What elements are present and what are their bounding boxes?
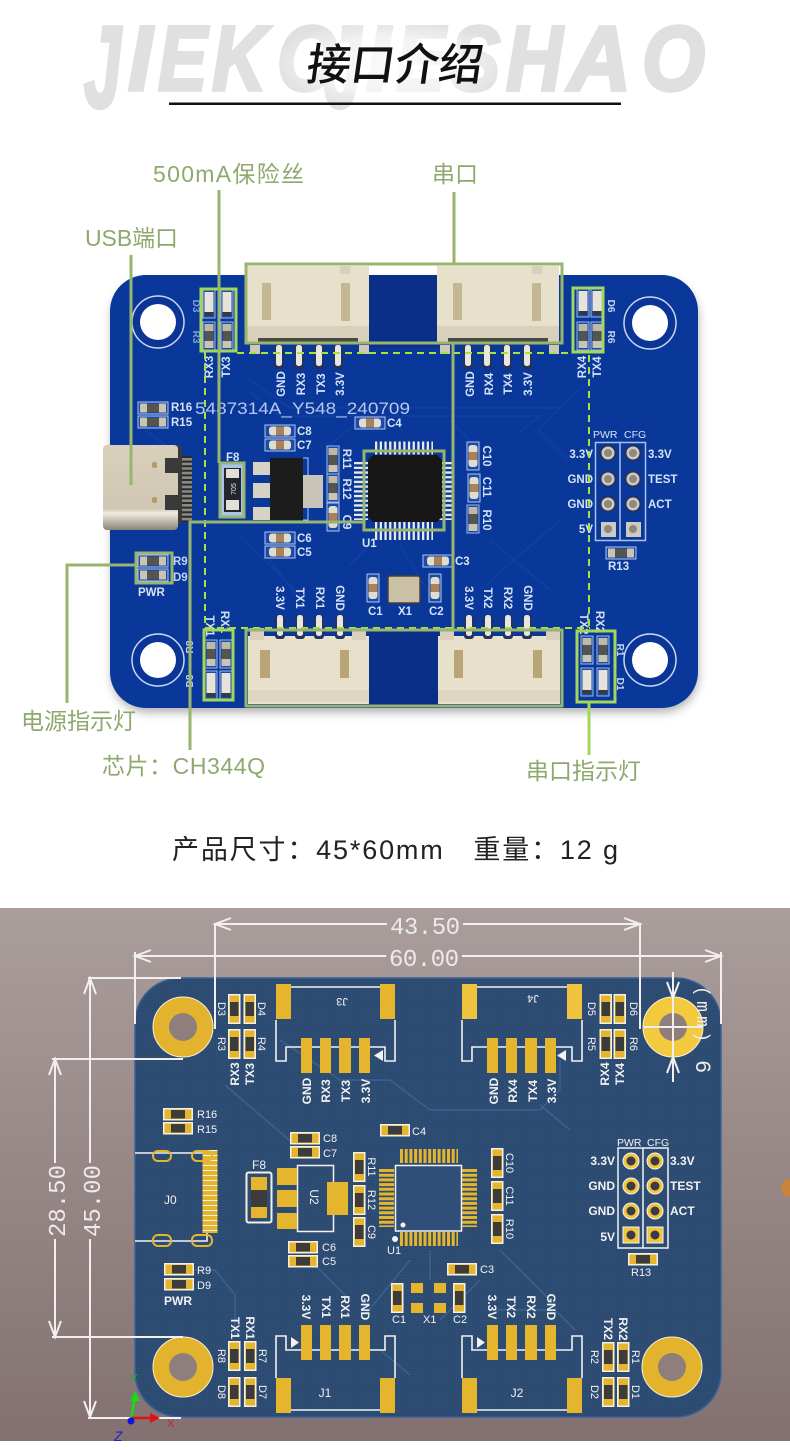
SMD group D5 D6 R5 R6 — [585, 994, 639, 1086]
SMD R9 D9 PWR — [164, 1263, 211, 1308]
connector J2 — [462, 1294, 582, 1413]
resistors R16 R15: R16 — [171, 402, 192, 414]
resistor R13 — [606, 547, 636, 573]
SMD group R8 R7 D8 D7: RX1 — [243, 1316, 257, 1340]
watermark heading: O — [642, 8, 705, 110]
mounting pads — [153, 997, 703, 1397]
SMD C10 C11 R10: C11 — [503, 1186, 515, 1206]
board body — [110, 275, 698, 708]
watermark heading: J — [324, 3, 362, 132]
pin labels: bottom: RX1 — [313, 587, 325, 610]
fuse callout — [219, 190, 244, 517]
dimension: 28.50: 28.50 — [46, 1165, 73, 1237]
fuse F8: F8 — [252, 1158, 266, 1172]
connector J2: RX2 — [524, 1295, 538, 1319]
label: serial port: 串口 — [432, 161, 478, 187]
PCB body — [135, 978, 721, 1417]
chip callout — [190, 451, 444, 750]
connector J0: J0 — [164, 1193, 177, 1207]
LED group: bottom right: TX2 — [577, 613, 589, 635]
crystal X1 with C1 C2: X1 — [423, 1314, 436, 1326]
connector J1: GND — [358, 1294, 372, 1321]
axes gizmo: Z — [113, 1428, 123, 1444]
header PWR CFG: 3.3V — [670, 1154, 695, 1168]
header PWR CFG: GND — [588, 1179, 615, 1193]
header block PWR CFG: PWR — [593, 429, 618, 441]
watermark heading: E — [158, 7, 209, 110]
components C10 C11 R10: C11 — [480, 477, 492, 498]
power LED callout — [67, 553, 172, 703]
panel: callout lines — [67, 190, 615, 755]
SMD C10 C11 R10: C10 — [503, 1153, 515, 1173]
watermark heading: I — [128, 8, 154, 111]
pin labels: top: RX3 — [296, 373, 308, 395]
SMD group R2 R1 D2 D1: D2 — [588, 1385, 600, 1399]
LED group: top left: R3 — [190, 331, 201, 344]
label: power LED: 电源指示灯 — [21, 708, 136, 734]
dashed routing — [205, 352, 590, 630]
LED boxes — [201, 288, 615, 755]
LED group: top left: TX3 — [221, 356, 233, 378]
SMD group R8 R7 D8 D7: D7 — [256, 1385, 268, 1399]
chip U1: U1 — [387, 1245, 401, 1257]
connector J4: J4 — [527, 992, 539, 1004]
connector J3 — [276, 984, 395, 1104]
spec line: 产品尺寸：45*60mm 重量：12 g — [172, 835, 618, 865]
LED group: bottom right: D1 — [614, 678, 625, 691]
pin labels: bottom: GND — [521, 585, 533, 611]
SMD group D5 D6 R5 R6: R5 — [585, 1037, 597, 1051]
regulator U2: U2 — [307, 1189, 321, 1205]
orange marker — [781, 1179, 790, 1197]
SMD group R2 R1 D2 D1: TX2 — [601, 1318, 615, 1340]
components R11 R12 C9: R11 — [340, 449, 352, 470]
dimension: hole diameter: (mm) — [691, 986, 711, 1042]
LED group: top right: RX4 — [577, 355, 589, 378]
LED group: bottom right: RX2 — [593, 611, 605, 633]
connector J3: J3 — [336, 995, 348, 1007]
LED group: bottom left: RX1 — [218, 611, 230, 634]
pin labels: top: 3.3V — [335, 372, 347, 396]
connector J2: J2 — [511, 1386, 524, 1400]
connector J4: GND — [487, 1077, 501, 1104]
LED group: bottom left: TX1 — [203, 615, 215, 637]
connector J1: 3.3V — [299, 1295, 313, 1319]
SMD C8 C7 C6 C5 C4 C3: C5 — [322, 1256, 336, 1268]
header: title block — [84, 3, 705, 132]
connector J3: 3.3V — [359, 1079, 373, 1103]
board shadow — [112, 282, 698, 712]
pin labels: top: TX4 — [503, 373, 515, 395]
SMD C8 C7 C6 C5 C4 C3 — [288, 1124, 494, 1276]
resistor R13: R13 — [608, 561, 629, 573]
SMD C10 C11 R10: R10 — [503, 1219, 515, 1239]
SMD C8 C7 C6 C5 C4 C3: C8 — [323, 1133, 337, 1145]
header PWR CFG — [588, 1137, 701, 1248]
SMD R16 R15 — [163, 1108, 217, 1136]
label: chip: 芯片：CH344Q — [102, 753, 265, 779]
header block PWR CFG: CFG — [624, 429, 646, 441]
dimension: 45.00: 45.00 — [81, 1165, 108, 1237]
board serial text: 5487314A_Y548_240709 — [195, 399, 410, 418]
capacitors C8 C7 C6 C5 C4 C3: C8 — [297, 426, 312, 438]
chip U1: U1 — [362, 538, 377, 550]
pin labels: top: GND — [465, 371, 477, 397]
label: USB port: USB端口 — [85, 225, 178, 251]
connector J1 — [276, 1294, 395, 1413]
connector J4: 3.3V — [545, 1079, 559, 1103]
header block PWR CFG — [567, 429, 677, 541]
render background — [0, 908, 790, 1441]
header block PWR CFG: TEST — [648, 474, 677, 486]
connector J3: RX3 — [319, 1079, 333, 1103]
LED group: bottom left: R8 — [185, 640, 196, 653]
indicator R9 D9 PWR: D9 — [173, 572, 188, 584]
header PWR CFG: PWR — [617, 1137, 642, 1149]
capacitors C8 C7 C6 C5 C4 C3 — [265, 417, 470, 568]
chip U1 — [361, 448, 446, 550]
SMD group D3 D4 R3 R4 — [215, 994, 267, 1086]
axes gizmo — [113, 1373, 175, 1444]
connector J4: TX4 — [526, 1080, 540, 1102]
SMD R11 R12 C9: R11 — [365, 1157, 377, 1177]
pin labels: bottom: RX2 — [501, 587, 513, 609]
SMD R13 — [628, 1253, 658, 1279]
LED group: top right — [577, 289, 616, 378]
indicator R9 D9 PWR — [138, 555, 188, 599]
header PWR CFG: 3.3V — [590, 1154, 615, 1168]
watermark heading: J — [84, 3, 122, 132]
LED group: bottom right: R1 — [614, 644, 625, 657]
watermark heading: I — [366, 8, 392, 111]
LED group: top left: D3 — [190, 300, 201, 313]
SMD group D3 D4 R3 R4: RX3 — [228, 1062, 242, 1086]
SMD group D5 D6 R5 R6: RX4 — [598, 1062, 612, 1086]
pin labels: top: TX3 — [316, 373, 328, 395]
regulator U2 — [253, 458, 323, 520]
SMD C8 C7 C6 C5 C4 C3: C7 — [323, 1148, 337, 1160]
USB-C connector — [103, 445, 192, 530]
SMD group D3 D4 R3 R4: R4 — [255, 1037, 267, 1051]
connector J4 — [462, 984, 582, 1104]
crystal X1 with C1 C2 — [367, 574, 444, 618]
pin labels: bottom: 3.3V — [273, 586, 285, 610]
SMD R9 D9 PWR: D9 — [197, 1280, 211, 1292]
watermark heading — [84, 3, 705, 132]
SMD R11 R12 C9 — [353, 1152, 377, 1247]
SMD group D5 D6 R5 R6: D6 — [627, 1002, 639, 1016]
panel: PCB render — [0, 908, 790, 1444]
serial port boxes — [246, 192, 562, 706]
SMD R16 R15: R15 — [197, 1124, 217, 1136]
SMD group R2 R1 D2 D1 — [588, 1317, 641, 1407]
PCB traces — [185, 1040, 575, 1375]
pin labels: top: RX4 — [484, 372, 496, 395]
connector J4: RX4 — [506, 1079, 520, 1103]
watermark heading: A — [566, 8, 631, 111]
SMD group R2 R1 D2 D1: RX2 — [616, 1317, 630, 1341]
connector pins: top — [274, 345, 532, 369]
header block PWR CFG: 3.3V — [569, 449, 593, 461]
indicator R9 D9 PWR: R9 — [173, 556, 188, 568]
label: 500mA fuse: 500mA保险丝 — [153, 161, 304, 187]
pin labels: bottom: TX2 — [481, 587, 493, 609]
dimension: 43.50 — [215, 915, 640, 1029]
fuse F8: F8 — [226, 452, 240, 464]
SMD group R8 R7 D8 D7: TX1 — [228, 1317, 242, 1339]
dimension: hole diameter: 6 — [689, 1060, 714, 1073]
SMD group D5 D6 R5 R6: D5 — [585, 1002, 597, 1016]
connector J1: TX1 — [319, 1296, 333, 1318]
crystal X1 with C1 C2: C2 — [453, 1314, 467, 1326]
SMD group D3 D4 R3 R4: D4 — [255, 1002, 267, 1016]
regulator U2 — [277, 1166, 348, 1232]
crystal X1 with C1 C2: C1 — [368, 606, 383, 618]
SMD C8 C7 C6 C5 C4 C3: C3 — [480, 1264, 494, 1276]
watermark heading: H — [506, 8, 565, 110]
title underline — [169, 102, 621, 105]
pin labels: bottom: TX1 — [293, 587, 305, 609]
SMD R13: R13 — [631, 1267, 651, 1279]
capacitors C8 C7 C6 C5 C4 C3: C6 — [297, 533, 312, 545]
components R11 R12 C9 — [327, 446, 352, 531]
label: serial LED: 串口指示灯 — [526, 758, 641, 784]
SMD group R8 R7 D8 D7 — [215, 1316, 268, 1407]
header block PWR CFG: GND — [567, 499, 593, 511]
capacitors C8 C7 C6 C5 C4 C3: C5 — [297, 547, 312, 559]
watermark heading: K — [212, 7, 271, 110]
SMD C8 C7 C6 C5 C4 C3: C4 — [412, 1126, 426, 1138]
axes gizmo: Y — [130, 1373, 138, 1385]
pin labels: bottom: 3.3V — [462, 586, 474, 610]
dimension: 28.50 — [46, 1059, 183, 1337]
SMD group R8 R7 D8 D7: D8 — [215, 1385, 227, 1399]
connector J2: GND — [544, 1294, 558, 1321]
SMD group D3 D4 R3 R4: TX3 — [243, 1063, 257, 1085]
SMD group R2 R1 D2 D1: D1 — [629, 1385, 641, 1399]
connector J1: J1 — [319, 1386, 332, 1400]
components C10 C11 R10: R10 — [480, 509, 492, 531]
SMD C8 C7 C6 C5 C4 C3: C6 — [322, 1242, 336, 1254]
SMD R11 R12 C9: C9 — [365, 1225, 377, 1239]
header PWR CFG: 5V — [600, 1230, 615, 1244]
LED group: top right: D6 — [605, 300, 616, 313]
dimension: 60.00: 60.00 — [389, 947, 459, 974]
LED group: bottom left: D8 — [185, 674, 196, 687]
dark recess between connectors — [369, 275, 439, 347]
header PWR CFG: GND — [588, 1204, 615, 1218]
dimension: 45.00 — [81, 978, 181, 1418]
dimension: hole diameter — [644, 972, 714, 1082]
connector: bottom right — [438, 628, 560, 704]
header block PWR CFG: GND — [567, 474, 593, 486]
pin labels: top: GND — [276, 371, 288, 397]
pin labels: bottom: GND — [333, 585, 345, 611]
axes gizmo: X — [167, 1418, 175, 1430]
resistors R16 R15: R15 — [171, 417, 193, 429]
connector: top right — [437, 266, 559, 354]
capacitors C8 C7 C6 C5 C4 C3: C7 — [297, 440, 312, 452]
title: 接口介绍 — [304, 41, 486, 90]
mounting holes — [132, 296, 676, 686]
LED group: top left — [190, 290, 233, 378]
SMD group D3 D4 R3 R4: R3 — [215, 1037, 227, 1051]
watermark heading: O — [277, 8, 338, 110]
header PWR CFG: CFG — [647, 1137, 669, 1149]
SMD group R8 R7 D8 D7: R7 — [256, 1349, 268, 1363]
crystal X1 with C1 C2: X1 — [398, 606, 413, 618]
components R11 R12 C9: C9 — [340, 515, 352, 529]
dimension: 60.00 — [135, 947, 721, 1024]
components C10 C11 R10: C10 — [480, 445, 492, 467]
SMD C10 C11 R10 — [491, 1148, 515, 1244]
connector J0 — [135, 1150, 212, 1246]
LED group: top right: TX4 — [592, 356, 604, 378]
connector pins: bottom — [275, 615, 532, 639]
connector J3: TX3 — [339, 1080, 353, 1102]
LED group: bottom right — [577, 611, 625, 696]
watermark heading: E — [396, 7, 447, 110]
USB callout — [130, 255, 132, 485]
fuse F8 — [246, 1158, 272, 1222]
LED group: bottom left — [185, 611, 232, 699]
connector J2: TX2 — [504, 1296, 518, 1318]
components C10 C11 R10 — [467, 442, 492, 533]
SMD R16 R15: R16 — [197, 1109, 217, 1121]
connector: bottom left — [248, 628, 369, 704]
pin labels: top: 3.3V — [523, 372, 535, 396]
SMD R9 D9 PWR: R9 — [197, 1265, 211, 1277]
SMD group D5 D6 R5 R6: TX4 — [613, 1063, 627, 1085]
SMD group R2 R1 D2 D1: R2 — [588, 1350, 600, 1364]
header block PWR CFG: ACT — [648, 499, 672, 511]
crystal X1 with C1 C2: C1 — [392, 1314, 406, 1326]
dimension: 43.50: 43.50 — [390, 915, 460, 942]
pin labels: bottom — [273, 585, 533, 611]
crystal X1 with C1 C2: C2 — [429, 606, 444, 618]
connector J2: 3.3V — [485, 1295, 499, 1319]
capacitors C8 C7 C6 C5 C4 C3: C3 — [455, 556, 470, 568]
panel: real board photo — [103, 266, 698, 712]
LED group: top left: RX3 — [204, 356, 216, 378]
components R11 R12 C9: R12 — [340, 478, 352, 500]
header PWR CFG: ACT — [670, 1204, 695, 1218]
connector J3: GND — [300, 1077, 314, 1104]
fuse F8 — [221, 452, 244, 516]
SMD R9 D9 PWR: PWR — [164, 1294, 192, 1308]
SMD group D5 D6 R5 R6: R6 — [627, 1037, 639, 1051]
SMD R11 R12 C9: R12 — [365, 1190, 377, 1210]
chip U1 — [386, 1156, 470, 1257]
capacitors C8 C7 C6 C5 C4 C3: C4 — [387, 418, 402, 430]
board traces — [145, 380, 590, 600]
LED group: top right: R6 — [605, 331, 616, 344]
header block PWR CFG: 3.3V — [648, 449, 672, 461]
crystal X1 with C1 C2 — [391, 1283, 467, 1326]
resistors R16 R15 — [138, 402, 193, 429]
SMD group D3 D4 R3 R4: D3 — [215, 1002, 227, 1016]
SMD group R2 R1 D2 D1: R1 — [629, 1350, 641, 1364]
header PWR CFG: TEST — [670, 1179, 701, 1193]
header block PWR CFG: 5V — [579, 524, 593, 536]
connector: top left — [246, 266, 369, 354]
watermark heading: S — [450, 7, 500, 110]
fuse F8: 705 — [231, 483, 238, 495]
pin labels: top — [276, 371, 535, 397]
connector J1: RX1 — [338, 1295, 352, 1319]
indicator R9 D9 PWR: PWR — [138, 587, 166, 599]
SMD group R8 R7 D8 D7: R8 — [215, 1349, 227, 1363]
